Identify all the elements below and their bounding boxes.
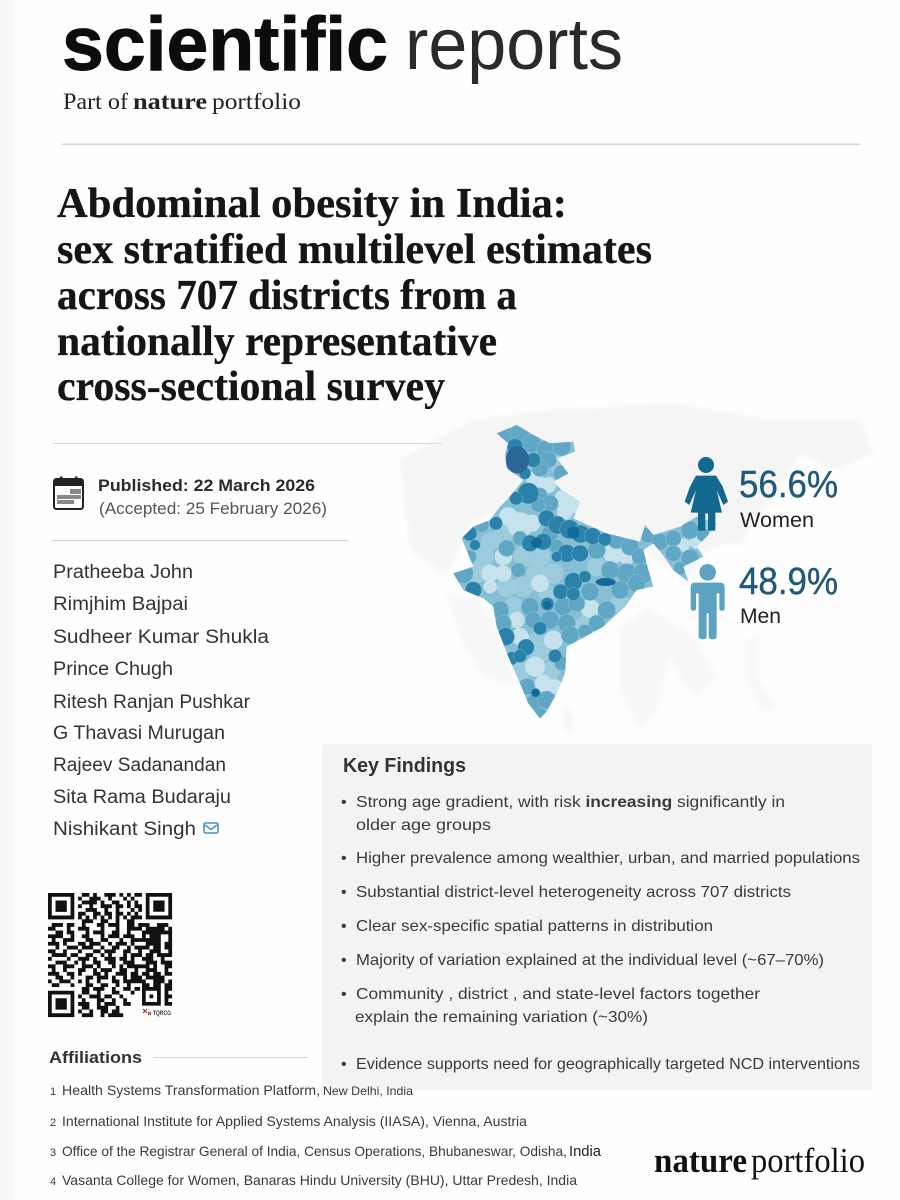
findings list: Higher prevalence among wealthier, urban, and married populations: [356, 850, 860, 867]
publisher logo: portfolio: [751, 1141, 865, 1180]
findings list: •: [341, 1056, 347, 1073]
icon: envelope: [204, 823, 218, 833]
author list: Prince Chugh: [53, 659, 173, 680]
heading: key findings: Key Findings: [343, 755, 466, 777]
publication dates: [98, 476, 327, 518]
findings list: Community , district , and state-level factors together: [356, 986, 761, 1003]
stat: women: Women: [740, 509, 814, 532]
findings list: •: [341, 850, 347, 867]
affiliations list: 3: [50, 1147, 56, 1159]
tagline: Part of: [63, 89, 128, 115]
publisher logo: [654, 1141, 865, 1180]
author list: Rajeev Sadanandan: [53, 755, 226, 776]
stat: women: 56.6%: [739, 464, 838, 506]
rule under title: [52, 443, 442, 444]
findings list: Substantial district-level heterogeneity across 707 districts: [356, 884, 791, 901]
affiliations list: New Delhi, India: [323, 1084, 413, 1098]
author list: Rimjhim Bajpai: [53, 594, 188, 615]
stat: women: [739, 464, 838, 532]
icon: calendar: [54, 476, 83, 509]
author list: Ritesh Ranjan Pushkar: [53, 692, 251, 713]
stat: men: Men: [740, 605, 781, 628]
affiliations list: [50, 1082, 602, 1188]
findings list: Evidence supports need for geographically targeted NCD interventions: [356, 1056, 860, 1073]
map: India prevalence by district: [400, 403, 873, 733]
affiliations list: 4: [50, 1176, 56, 1188]
stat: men: [739, 561, 838, 628]
author list: Nishikant Singh: [53, 819, 196, 840]
author list: Sudheer Kumar Shukla: [53, 627, 269, 648]
findings list: Strong age gradient, with risk increasing significantly in: [356, 794, 785, 811]
affiliations list: 2: [50, 1117, 56, 1129]
title: nationally representative: [57, 319, 497, 365]
author list: Pratheeba John: [53, 562, 193, 583]
findings list: older age groups: [356, 817, 491, 834]
tagline: [63, 89, 301, 115]
author list: G Thavasi Murugan: [53, 723, 225, 744]
tagline: portfolio: [212, 89, 301, 115]
publication dates: Published: 22 March 2026: [98, 476, 315, 495]
publisher logo: nature: [654, 1141, 747, 1180]
findings list: Majority of variation explained at the individual level (~67–70%): [356, 952, 824, 969]
title: sex stratified multilevel estimates: [57, 227, 652, 273]
findings list: Clear sex-specific spatial patterns in distribution: [356, 918, 713, 935]
journal masthead: reports: [405, 5, 623, 85]
title: across 707 districts from a: [57, 273, 517, 319]
findings list: •: [341, 952, 347, 969]
affiliations list: Health Systems Transformation Platform,: [62, 1082, 320, 1098]
title: cross-sectional survey: [57, 364, 445, 410]
journal masthead: [62, 2, 623, 87]
affiliations list: 1: [50, 1086, 56, 1098]
findings list: •: [341, 918, 347, 935]
title: Abdominal obesity in India:: [57, 181, 567, 227]
title: [57, 181, 652, 410]
icon: woman: [685, 457, 728, 531]
publication dates: (Accepted: 25 February 2026): [99, 500, 327, 518]
journal masthead: scientific: [62, 2, 388, 87]
findings list: •: [341, 794, 347, 811]
background world map: [400, 403, 873, 733]
QR generator mark: TQRCG: [153, 1010, 171, 1017]
QR code: [48, 893, 174, 1019]
findings list: explain the remaining variation (~30%): [355, 1009, 648, 1026]
author list: Sita Rama Budaraju: [53, 787, 231, 808]
affiliations list: International Institute for Applied Systems Analysis (IIASA), Vienna, Austria: [62, 1113, 527, 1129]
affiliations list: India: [569, 1143, 602, 1160]
author list: [53, 562, 269, 840]
affiliations list: Office of the Registrar General of India, Census Operations, Bhubaneswar, Odisha,: [62, 1143, 567, 1159]
findings list: •: [341, 986, 347, 1003]
tagline: nature: [133, 89, 207, 115]
QR generator mark: [143, 1009, 171, 1017]
findings list: •: [341, 884, 347, 901]
icon: man: [691, 564, 725, 639]
findings list: [341, 794, 860, 1073]
stat: men: 48.9%: [739, 561, 838, 603]
affiliations list: Vasanta College for Women, Banaras Hindu University (BHU), Uttar Predesh, India: [62, 1172, 577, 1188]
panel: key findings: [322, 744, 872, 1090]
heading: affiliations: Affiliations: [49, 1048, 142, 1067]
